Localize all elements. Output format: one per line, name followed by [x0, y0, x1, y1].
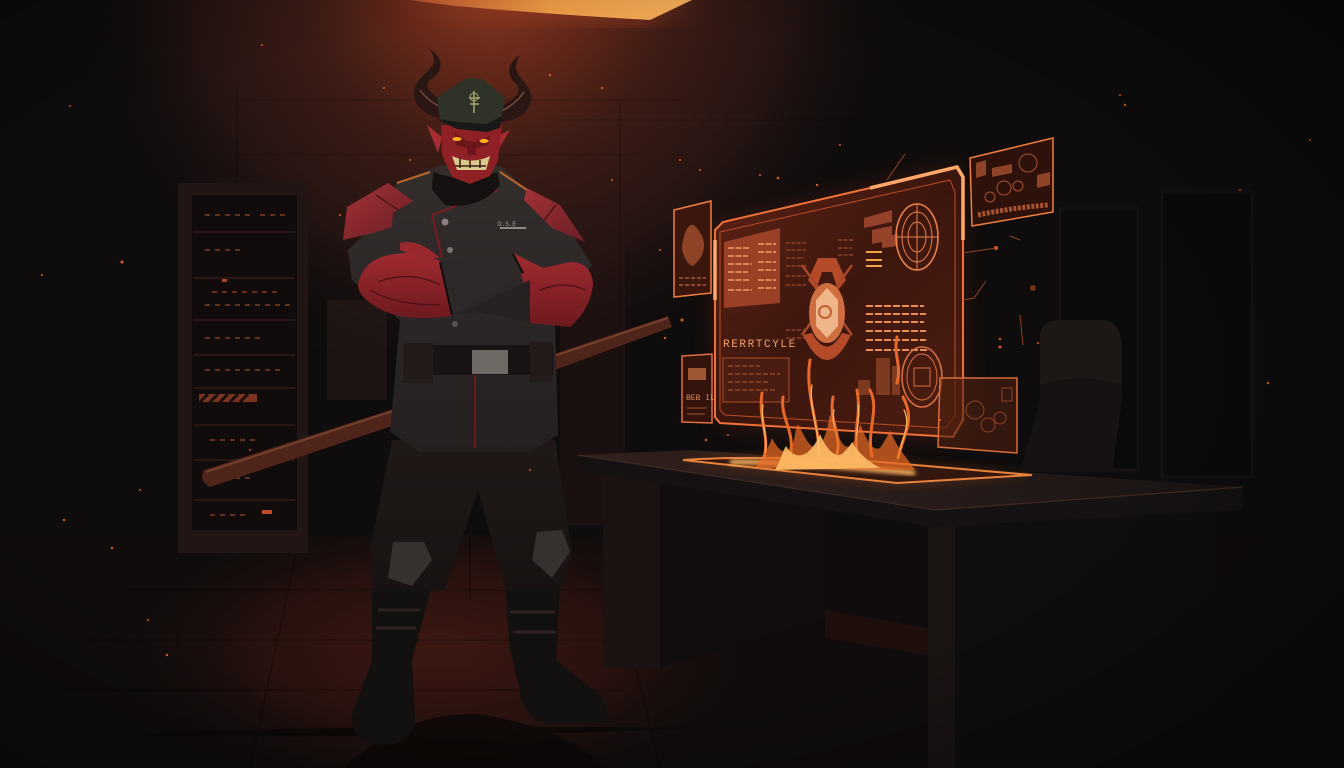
server rack: [178, 183, 308, 553]
main holographic screen: [715, 167, 963, 437]
head: [427, 125, 510, 184]
wooden staff: [202, 316, 672, 487]
jacket body: [348, 166, 592, 452]
buttons and badge: [442, 218, 526, 327]
belt: [403, 342, 553, 383]
glowing desk projector ring: [683, 458, 1032, 483]
flame core: [775, 434, 880, 470]
shoulder pads: [343, 183, 585, 242]
knee pads: [388, 530, 570, 586]
rim light: [397, 172, 527, 190]
chair: [1020, 320, 1122, 472]
floating embers: [41, 44, 1311, 656]
buttons and badge: D.S.E: [498, 221, 516, 228]
bar cluster: [858, 358, 900, 395]
gauntlets: [440, 254, 530, 323]
collar: [432, 172, 500, 206]
screen glow: [715, 167, 963, 437]
side panel: bottom right: [938, 378, 1017, 453]
horns: [414, 48, 531, 122]
trousers: [370, 440, 572, 590]
middle text columns: [786, 240, 854, 338]
flames: [760, 337, 915, 465]
side panel: bottom left: BEB IL: [686, 394, 715, 403]
arms: [358, 242, 593, 327]
text panel: [724, 228, 780, 308]
floor: [0, 535, 1344, 768]
hologram connector lines: [887, 154, 1023, 345]
screen heading text: RERRTCYLE: [723, 339, 797, 351]
side panel: top right: [970, 138, 1053, 226]
ceiling light: [380, 0, 700, 20]
ground shadow: [148, 714, 698, 768]
lower dial: [902, 347, 942, 407]
flame glow: [760, 454, 915, 476]
radar dial: [896, 204, 938, 270]
lower data box: [723, 358, 789, 402]
desk: [578, 450, 1243, 768]
low fire mass: [755, 414, 915, 470]
side panel: bottom left: [682, 354, 715, 423]
flame tendrils: [761, 337, 909, 460]
officer cap: [437, 78, 505, 132]
character: demon officer: [148, 48, 698, 768]
boots: [352, 585, 607, 745]
holographic display: [674, 138, 1053, 453]
side panel: top left: [674, 201, 711, 297]
central emblem: [802, 258, 852, 360]
readout rows: [866, 306, 928, 350]
